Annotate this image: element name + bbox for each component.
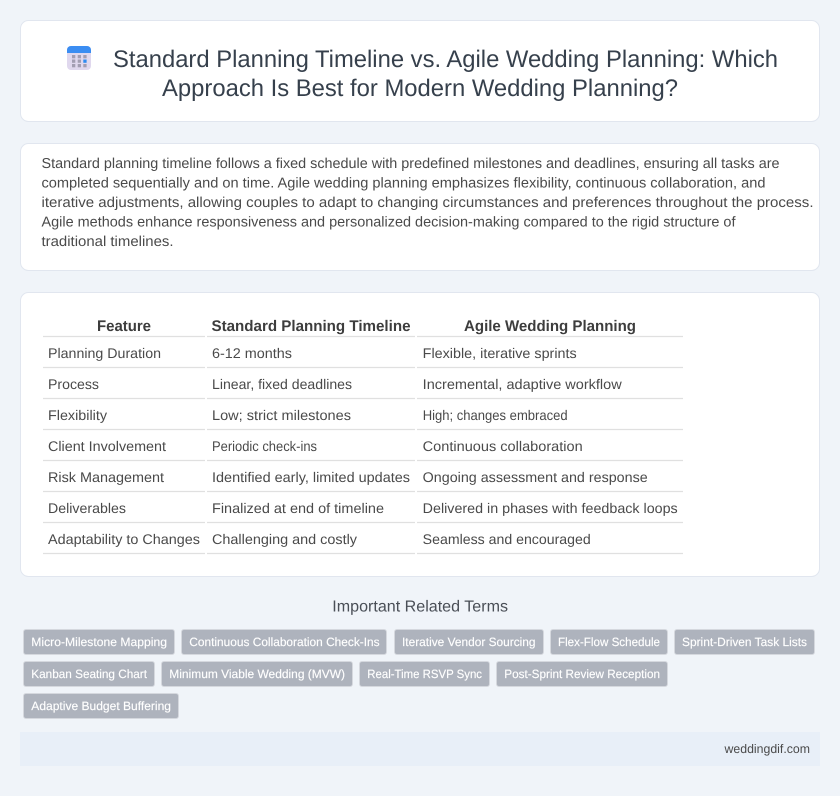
row: deliverables: Finalized at end of timeline [212,500,384,516]
row: process [48,376,623,392]
tag: Post-Sprint Review Reception [504,667,660,681]
icon: calendar [67,46,91,70]
tag [24,630,174,654]
row: planning duration: Planning Duration [48,345,161,361]
row: client involvement: Periodic check-ins [212,438,317,454]
tag: Adaptive Budget Buffering [31,699,171,713]
title: Approach Is Best for Modern Wedding Planning? [162,75,678,102]
tag: Continuous Collaboration Check-Ins [189,635,380,649]
row: process: Linear, fixed deadlines [212,376,352,392]
tag list: related terms [24,630,814,718]
table header: Standard Planning Timeline [212,318,411,335]
tag: Kanban Seating Chart [31,667,148,681]
row: client involvement: Client Involvement [48,438,166,454]
row: risk management: Risk Management [48,469,164,485]
tag [162,662,352,686]
tag [360,662,490,686]
title: Standard Planning Timeline vs. Agile Wedding Planning: Which [113,46,778,73]
table header [97,318,636,335]
title [113,46,778,102]
footer bar [20,732,820,766]
footer source: weddingdif.com [724,742,810,756]
tag [496,662,668,686]
row: client involvement: Continuous collaboration [423,438,583,454]
text block: summary: Standard planning timeline follows a fixed schedule with predefined milestones and deadlines, ensuring all tasks are [42,156,780,172]
row: planning duration: 6-12 months [212,345,292,361]
row: risk management: Identified early, limited updates [212,469,410,485]
row: process: Process [48,376,99,392]
tag [24,662,154,686]
row: planning duration: Flexible, iterative sprints [423,345,577,361]
row: adaptability to changes: Seamless and encouraged [423,531,591,547]
row: flexibility [48,407,568,423]
tag [182,630,386,654]
tag [550,630,668,654]
tag: Sprint-Driven Task Lists [682,635,807,649]
table header: Feature [97,318,151,335]
tag: Micro-Milestone Mapping [31,635,167,649]
row: adaptability to changes [48,531,591,547]
row: planning duration [48,345,577,361]
tag: Minimum Viable Wedding (MVW) [169,667,345,681]
text block: summary: iterative adjustments, allowing couples to adapt to changing circumstances and preferences throughout the process. [42,195,814,211]
text block: summary: Agile methods enhance responsiveness and personalized decision-making compared to the rigid structure of [42,214,736,230]
row: deliverables [48,500,678,516]
row: flexibility: Flexibility [48,407,107,423]
row: deliverables: Deliverables [48,500,126,516]
row: flexibility: High; changes embraced [423,407,568,423]
heading: related terms: Important Related Terms [332,598,508,616]
panel: summary paragraph [20,144,820,270]
text block: summary: completed sequentially and on time. Agile wedding planning emphasizes flexibility, continuous collaboration, and [42,176,766,192]
panel: comparison table [20,292,820,576]
row: client involvement [48,438,583,454]
row: flexibility: Low; strict milestones [212,407,351,423]
tag [394,630,544,654]
text block: summary [42,156,814,250]
row: deliverables: Delivered in phases with feedback loops [423,500,678,516]
row: risk management: Ongoing assessment and response [423,469,648,485]
panel: title card [20,20,820,122]
tag: Iterative Vendor Sourcing [402,635,536,649]
tag: Real-Time RSVP Sync [367,667,482,681]
row: process: Incremental, adaptive workflow [423,376,623,392]
row: risk management [48,469,648,485]
row: adaptability to changes: Challenging and costly [212,531,357,547]
tag [674,630,814,654]
text block: summary: traditional timelines. [42,234,174,250]
tag: Flex-Flow Schedule [558,635,660,649]
table header: Agile Wedding Planning [464,318,636,335]
tag [24,694,178,718]
row: adaptability to changes: Adaptability to Changes [48,531,200,547]
